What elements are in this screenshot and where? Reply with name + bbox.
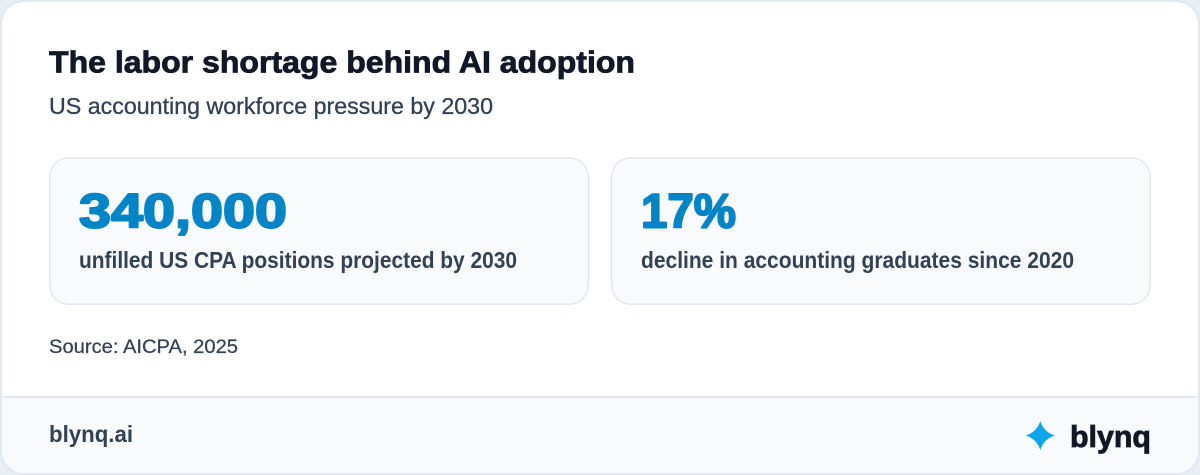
stat value: 340,000: 340,000 [79,186,287,238]
panel: unfilled positions stat [50,158,588,304]
stat label: graduate decline: decline in accounting graduates since 2020 [641,247,1074,273]
stat value: 17%: 17% [641,186,736,238]
source note: Source: AICPA, 2025 [49,337,238,358]
brand wordmark: blynq [1070,419,1151,454]
icon: four-point star [1026,421,1055,450]
panel: graduate decline stat [612,158,1150,304]
footer band [2,397,1198,473]
title: The labor shortage behind AI adoption [49,44,635,80]
footer site link: blynq.ai [49,421,133,447]
subtitle: US accounting workforce pressure by 2030 [49,93,493,119]
stat label: unfilled positions: unfilled US CPA positions projected by 2030 [79,247,517,273]
brand logo [1026,419,1151,454]
